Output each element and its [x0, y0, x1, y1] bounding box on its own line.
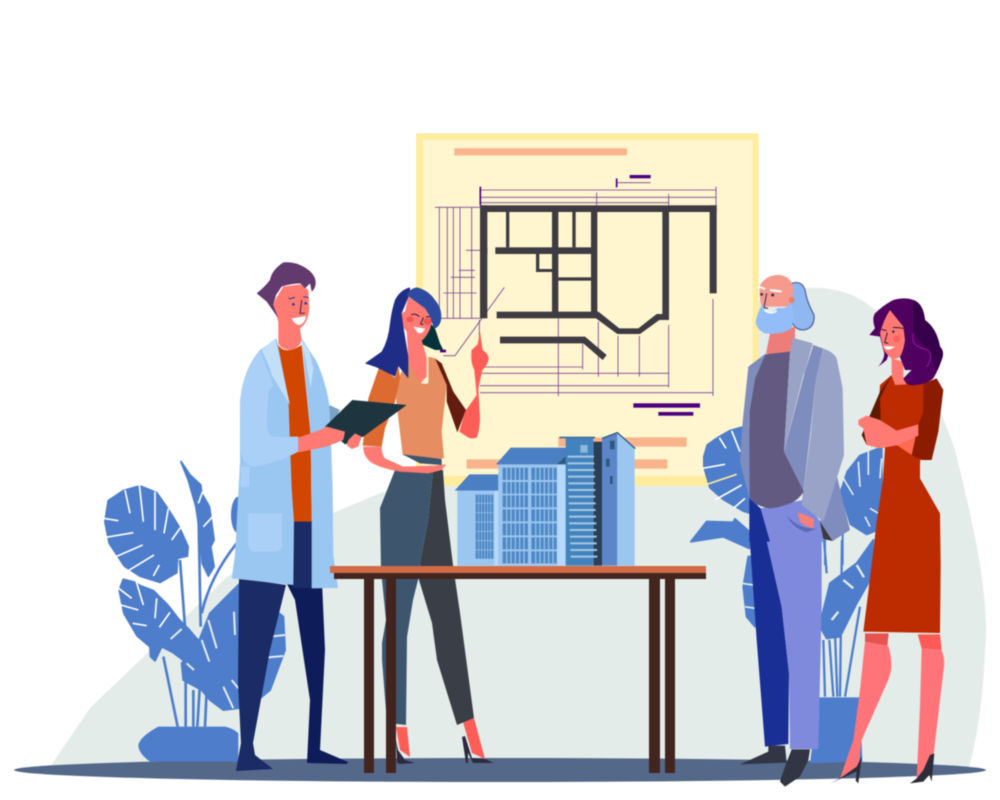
hair highlight — [913, 333, 931, 367]
poster title bars — [454, 148, 687, 469]
plant stems — [163, 503, 237, 727]
top hair — [407, 287, 441, 328]
woman with blue hair — [363, 287, 494, 764]
hand in pocket — [797, 512, 814, 528]
older man — [740, 275, 850, 787]
face details — [406, 314, 432, 333]
face details — [882, 327, 903, 350]
leaf slits — [103, 484, 213, 627]
neck — [766, 327, 795, 356]
red dress — [863, 375, 941, 633]
face — [273, 284, 309, 330]
dark trousers and shoes — [236, 520, 348, 771]
right tower — [602, 433, 635, 566]
poster sheet — [416, 133, 759, 486]
right plant — [691, 427, 882, 763]
back hair — [420, 317, 443, 350]
beard — [756, 301, 793, 334]
shoes — [740, 746, 810, 787]
trousers light side — [765, 533, 822, 749]
jacket tail — [820, 475, 850, 541]
man in lab coat — [232, 262, 407, 771]
table — [330, 566, 706, 773]
small back leaf — [231, 497, 246, 533]
dimension lines — [435, 178, 716, 396]
right sleeve — [912, 378, 943, 460]
belt — [403, 454, 442, 465]
table top — [330, 566, 706, 573]
lapel — [784, 338, 813, 452]
back sleeve — [329, 405, 340, 422]
floor plan walls — [480, 205, 717, 360]
curly hair — [869, 298, 943, 385]
ground shadow — [14, 758, 986, 782]
high heels — [830, 753, 934, 783]
trousers upper — [761, 500, 823, 542]
waist arm — [363, 447, 446, 473]
blouse — [396, 357, 447, 460]
pocket shade — [787, 516, 817, 532]
jacket outer — [802, 345, 844, 522]
coat cuff tab — [241, 467, 249, 487]
trousers dark side — [749, 533, 789, 747]
legs — [865, 633, 889, 646]
coat pocket — [248, 513, 282, 552]
poster notes — [440, 175, 700, 416]
coat sleeve — [240, 350, 298, 467]
jacket inner panel — [784, 345, 823, 505]
neck — [892, 358, 907, 385]
necklace — [408, 356, 428, 383]
large monstera leaf — [105, 486, 188, 582]
hands — [298, 427, 362, 452]
orange shirt — [277, 342, 312, 522]
coat right panel — [302, 338, 338, 588]
low building — [455, 474, 498, 566]
stair tower — [559, 437, 602, 566]
crossed arms — [858, 416, 918, 448]
back hair — [792, 282, 814, 330]
neck and chest — [407, 332, 427, 383]
right plant leaves lower and pot — [742, 540, 873, 763]
mid building — [496, 448, 567, 566]
face — [401, 297, 432, 342]
neck — [278, 317, 302, 350]
trousers and shoes — [380, 470, 494, 764]
grey shirt — [749, 352, 804, 508]
woman in red dress — [830, 298, 944, 783]
coat collar — [262, 338, 313, 405]
right sleeve — [435, 358, 466, 432]
chest shadow — [897, 435, 920, 455]
third leaf — [182, 583, 285, 710]
second leaf — [119, 579, 203, 676]
coat left panel — [232, 338, 294, 585]
facial features — [288, 297, 308, 325]
left sleeve — [363, 365, 400, 447]
raised arm — [459, 332, 489, 438]
hair — [257, 262, 316, 318]
left plant pot — [138, 727, 238, 762]
building model — [455, 433, 635, 566]
main hair — [365, 287, 410, 378]
poster: floor plan — [416, 133, 759, 486]
jacket left front — [740, 353, 766, 498]
left plant — [103, 462, 285, 762]
left sleeve — [862, 375, 892, 445]
darker hair shade — [913, 300, 943, 370]
clipboard — [325, 400, 407, 444]
face — [880, 310, 905, 359]
face details — [758, 287, 795, 313]
background blob — [50, 288, 986, 767]
right plant leaves upper — [691, 427, 882, 565]
tall narrow leaf — [181, 462, 214, 576]
table legs and underside — [334, 572, 706, 773]
head — [759, 275, 793, 307]
